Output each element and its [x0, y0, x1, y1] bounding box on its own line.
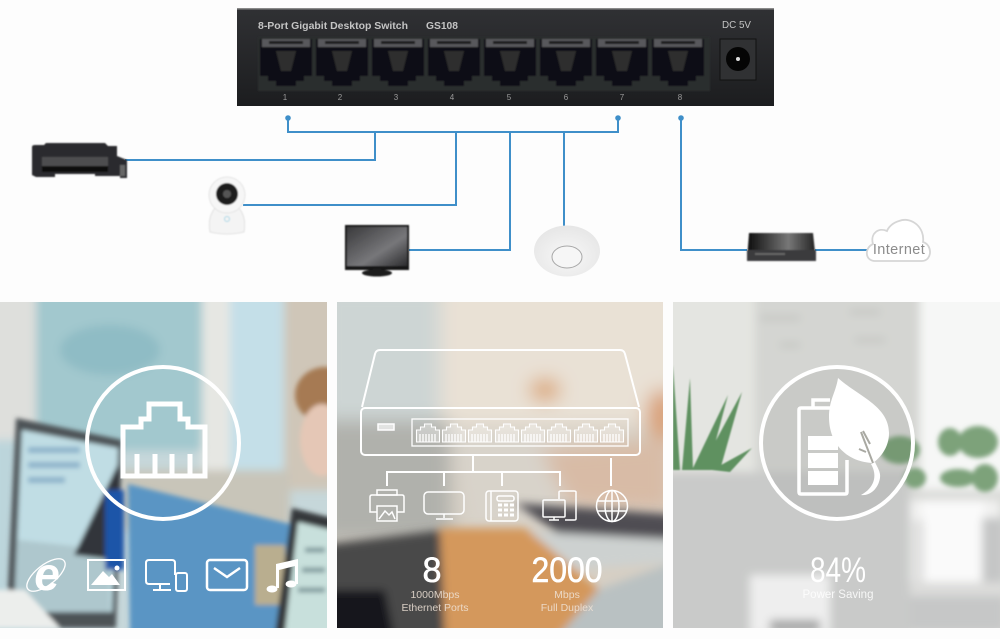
device diagram section	[32, 8, 930, 276]
port numbers: 4	[450, 93, 455, 102]
icon: battery and leaf in circle	[761, 367, 913, 519]
wireless access point	[534, 226, 600, 276]
model number: GS108	[426, 20, 458, 32]
security camera	[209, 177, 245, 234]
wiring lines	[387, 456, 611, 486]
icon: globe	[596, 490, 628, 522]
office photo background	[0, 302, 327, 628]
icon: browser	[22, 548, 70, 600]
internet label: Internet	[873, 242, 925, 258]
stat: speed: 2000	[532, 551, 602, 590]
printer	[32, 143, 127, 178]
panel: ethernet	[0, 302, 327, 628]
panel: power saving	[673, 302, 1000, 628]
stat: power saving: 84%	[810, 551, 866, 590]
laptop photo background	[337, 302, 663, 628]
icon: music note	[266, 559, 298, 592]
battery	[799, 400, 847, 494]
stat: speed	[532, 551, 602, 614]
switch line illustration	[361, 350, 640, 522]
port numbers: 6	[564, 93, 569, 102]
icon: desktop display	[424, 492, 464, 519]
ethernet ports	[258, 37, 710, 91]
icon: browser: e	[34, 548, 60, 600]
switch front panel	[237, 8, 774, 106]
stat: power saving: Power Saving	[803, 589, 873, 601]
stat: ports	[401, 551, 469, 614]
stat: ports: 8	[422, 551, 442, 590]
router	[747, 233, 816, 261]
stat: speed: Full Duplex	[541, 602, 594, 614]
port numbers	[283, 93, 683, 102]
power label: DC 5V	[722, 19, 751, 31]
icon: telephone	[486, 491, 518, 521]
port numbers: 7	[620, 93, 625, 102]
leaf	[829, 378, 889, 495]
icon: computer and phone	[146, 560, 187, 591]
stat: ports: Ethernet Ports	[401, 602, 469, 614]
stat: ports: 1000Mbps	[410, 589, 460, 601]
port numbers: 8	[678, 93, 683, 102]
icon: computer and tablet	[543, 491, 576, 520]
icon: RJ45 port in circle	[87, 367, 239, 519]
power jack	[720, 39, 756, 80]
internet cloud	[867, 220, 930, 261]
panel: ports and speed	[337, 302, 663, 628]
icon: printer	[370, 490, 404, 521]
monitor	[345, 225, 409, 276]
room photo background	[673, 302, 1000, 628]
port numbers: 3	[394, 93, 399, 102]
connection lines	[125, 116, 868, 250]
product name: 8-Port Gigabit Desktop Switch	[258, 20, 408, 32]
icon: mail	[207, 560, 247, 590]
port numbers: 5	[507, 93, 512, 102]
switch outline	[361, 350, 640, 455]
stat: power saving	[803, 551, 873, 601]
stat: speed: Mbps	[554, 589, 580, 601]
port numbers: 2	[338, 93, 343, 102]
icon: image	[88, 560, 125, 590]
port numbers: 1	[283, 93, 288, 102]
